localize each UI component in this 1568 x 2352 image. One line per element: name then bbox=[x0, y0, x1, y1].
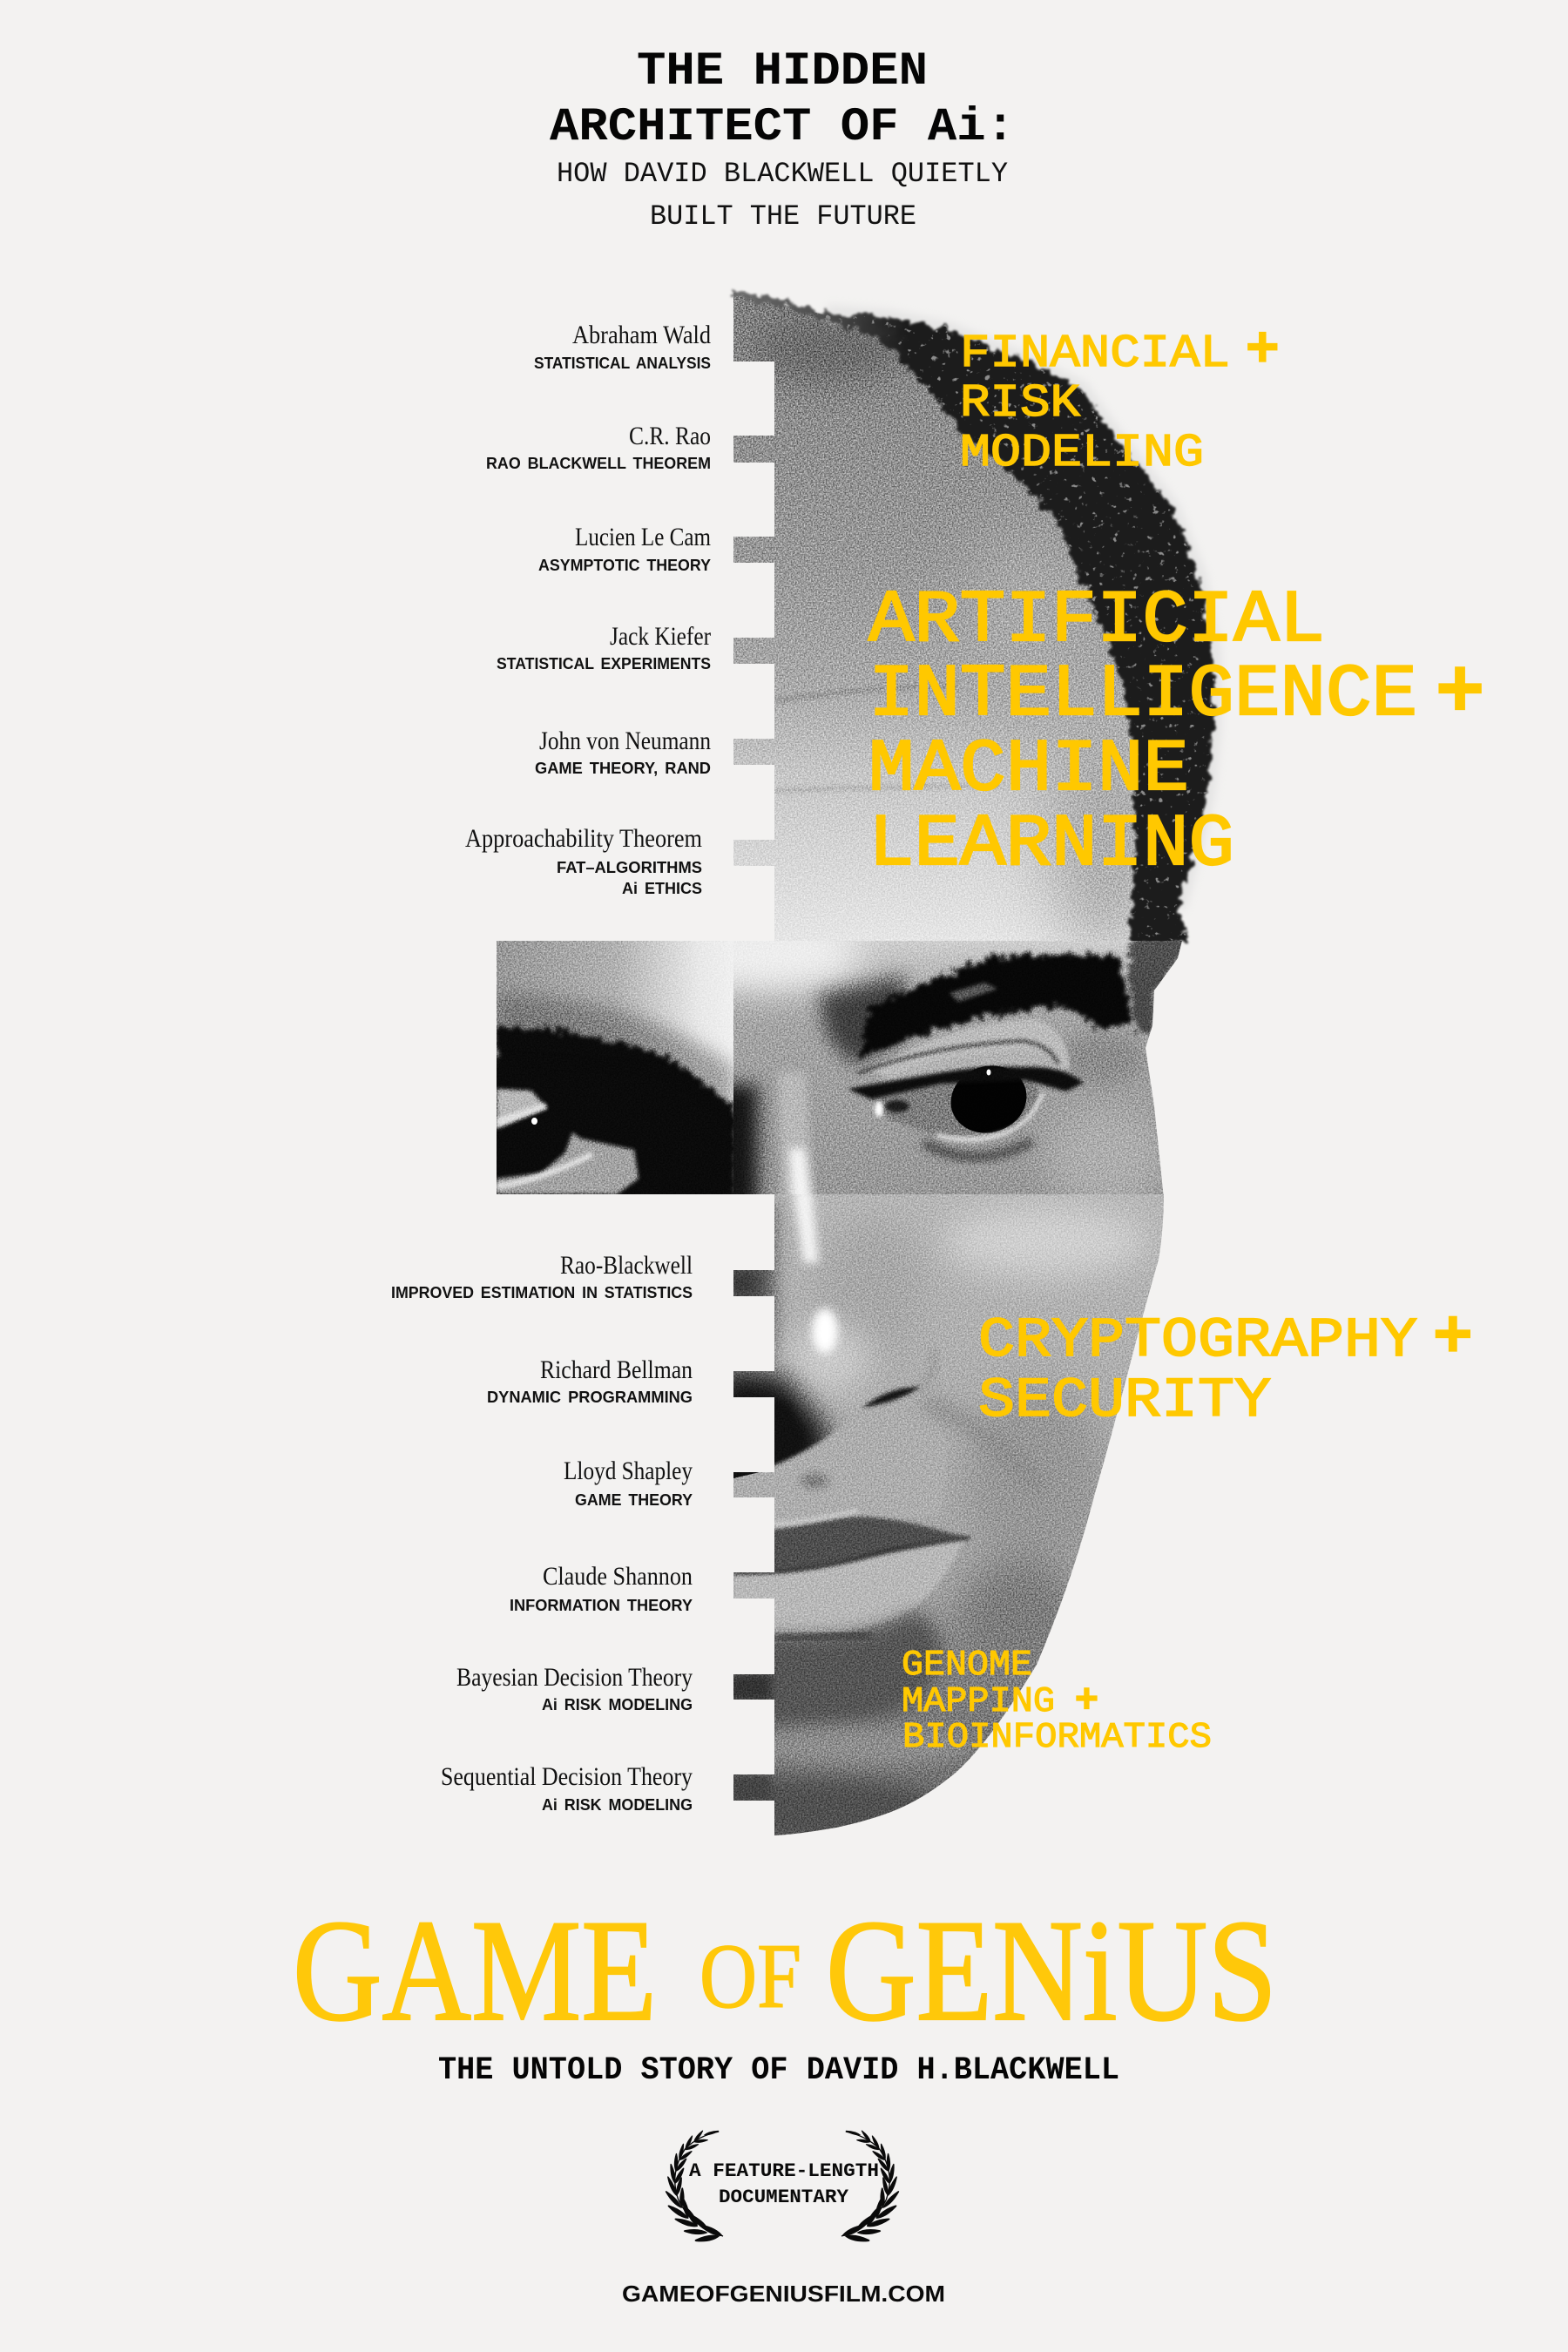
tagline: THE UNTOLD STORY OF DAVID H.BLACKWELL bbox=[438, 2052, 1119, 2089]
portrait: upper lip bbox=[733, 1517, 970, 1573]
entry: Approachability Theorem bbox=[465, 824, 702, 897]
entry: Jack Kiefer: Jack Kiefer bbox=[610, 622, 711, 651]
field label: artificial intelligence and machine learning bbox=[868, 580, 1484, 887]
field label: genome mapping and bioinformatics: GENOME bbox=[902, 1646, 1032, 1686]
poster bbox=[296, 52, 1482, 2301]
entry: John von Neumann: GAME THEORY, RAND bbox=[535, 759, 711, 777]
field label: genome mapping and bioinformatics: BIOINFORMATICS bbox=[902, 1718, 1212, 1758]
portrait: nose highlights bbox=[793, 1189, 819, 1263]
entry: Jack Kiefer: STATISTICAL EXPERIMENTS bbox=[497, 654, 711, 672]
field label: artificial intelligence and machine learning: MACHINE bbox=[868, 729, 1189, 812]
researcher list: lower bbox=[391, 1251, 693, 1814]
portrait: lower lip bbox=[733, 1539, 964, 1636]
entry: Lloyd Shapley bbox=[564, 1456, 693, 1509]
portrait: brow bbox=[819, 976, 906, 1064]
word: OF: OF bbox=[700, 1925, 801, 2027]
entry: Sequential Decision Theory bbox=[441, 1762, 693, 1814]
entry: Jack Kiefer bbox=[497, 622, 711, 672]
entry: Claude Shannon bbox=[510, 1562, 693, 1614]
badge text line two: DOCUMENTARY bbox=[719, 2186, 849, 2208]
entry: Rao-Blackwell: Rao-Blackwell bbox=[560, 1251, 693, 1280]
field label: financial and risk modeling: RISK bbox=[960, 377, 1080, 429]
word: GENiUS: GENiUS bbox=[826, 1890, 1277, 2051]
portrait: chin bbox=[733, 1612, 942, 1727]
plus sign: + bbox=[1246, 314, 1280, 378]
portrait of David Blackwell bbox=[488, 289, 1221, 1842]
entry: Claude Shannon: Claude Shannon bbox=[543, 1562, 693, 1591]
entry: Sequential Decision Theory: Ai RISK MODELING bbox=[542, 1795, 693, 1814]
entry: Lloyd Shapley: Lloyd Shapley bbox=[564, 1456, 693, 1485]
laurel badge bbox=[664, 2129, 901, 2243]
entry: Richard Bellman bbox=[487, 1355, 693, 1406]
field label: artificial intelligence and machine learning: ARTIFICIAL bbox=[868, 580, 1325, 663]
plus sign: + bbox=[1436, 641, 1484, 734]
entry: John von Neumann bbox=[535, 727, 711, 777]
film title bbox=[293, 1890, 1277, 2051]
portrait: eyelid bbox=[873, 1018, 1071, 1078]
portrait: nostril bbox=[862, 1387, 921, 1408]
entry: Abraham Wald bbox=[534, 321, 711, 372]
entry: Rao-Blackwell bbox=[391, 1251, 693, 1301]
entry: Abraham Wald: STATISTICAL ANALYSIS bbox=[534, 354, 711, 372]
entry: Lucien Le Cam bbox=[538, 523, 712, 574]
subtitle line one: HOW DAVID BLACKWELL QUIETLY bbox=[557, 158, 1008, 190]
headline line one: THE HIDDEN bbox=[637, 45, 928, 98]
entry: Sequential Decision Theory: Sequential Decision Theory bbox=[441, 1762, 693, 1791]
field label: cryptography and security: SECURITY bbox=[978, 1370, 1271, 1433]
entry: Bayesian Decision Theory: Bayesian Decision Theory bbox=[456, 1663, 693, 1692]
field label: cryptography and security bbox=[978, 1294, 1473, 1433]
plus sign: + bbox=[1075, 1675, 1098, 1720]
entry: Lucien Le Cam: Lucien Le Cam bbox=[575, 523, 711, 551]
field label: financial and risk modeling: MODELING bbox=[960, 427, 1204, 479]
plus sign: + bbox=[1433, 1294, 1473, 1371]
entry: Bayesian Decision Theory: Ai RISK MODELING bbox=[542, 1695, 693, 1713]
entry: C.R. Rao bbox=[486, 422, 711, 472]
portrait: eye band right side bbox=[733, 941, 1182, 1194]
icon: right laurel branch bbox=[841, 2129, 901, 2243]
icon: left laurel branch bbox=[664, 2129, 724, 2243]
field label: artificial intelligence and machine learning: INTELLIGENCE bbox=[868, 654, 1417, 737]
field label: genome mapping and bioinformatics bbox=[902, 1646, 1212, 1758]
researcher list: upper bbox=[465, 321, 712, 897]
entry: Richard Bellman: Richard Bellman bbox=[540, 1355, 693, 1384]
field label: artificial intelligence and machine learning: LEARNING bbox=[868, 804, 1234, 887]
portrait: eye band bbox=[497, 941, 1182, 1194]
portrait: hair bbox=[733, 290, 1213, 943]
entry: Lucien Le Cam: ASYMPTOTIC THEORY bbox=[538, 556, 712, 574]
entry: Claude Shannon: INFORMATION THEORY bbox=[510, 1596, 693, 1614]
website: GAMEOFGENIUSFILM.COM bbox=[622, 2281, 945, 2307]
headline line two: ARCHITECT OF Ai: bbox=[550, 101, 1015, 154]
field label: financial and risk modeling bbox=[960, 314, 1280, 479]
entry: C.R. Rao: C.R. Rao bbox=[629, 422, 711, 450]
entry: Abraham Wald: Abraham Wald bbox=[572, 321, 711, 349]
subtitle line two: BUILT THE FUTURE bbox=[650, 200, 916, 233]
entry: Rao-Blackwell: IMPROVED ESTIMATION IN STATISTICS bbox=[391, 1283, 693, 1301]
portrait: hair halo bbox=[827, 313, 1213, 909]
entry: John von Neumann: John von Neumann bbox=[539, 727, 711, 755]
entry: Approachability Theorem: FAT–ALGORITHMS bbox=[557, 858, 702, 876]
portrait: nose shadow bbox=[733, 1355, 843, 1458]
entry: Bayesian Decision Theory bbox=[456, 1663, 693, 1713]
word: GAME: GAME bbox=[293, 1890, 657, 2051]
entry: C.R. Rao: RAO BLACKWELL THEOREM bbox=[486, 454, 711, 472]
portrait: forehead section with tabs bbox=[733, 293, 1139, 941]
entry: Approachability Theorem: Ai ETHICS bbox=[622, 879, 702, 897]
entry: Lloyd Shapley: GAME THEORY bbox=[575, 1490, 693, 1509]
entry: Approachability Theorem: Approachability Theorem bbox=[465, 824, 702, 853]
portrait: lower face with tabs bbox=[733, 1194, 1164, 1835]
field label: financial and risk modeling: FINANCIAL bbox=[960, 328, 1230, 380]
entry: Richard Bellman: DYNAMIC PROGRAMMING bbox=[487, 1388, 693, 1406]
title bbox=[550, 45, 1015, 233]
field label: genome mapping and bioinformatics: MAPPING bbox=[902, 1682, 1055, 1722]
portrait: iris and eye bbox=[871, 1073, 1044, 1137]
badge text line one: A FEATURE-LENGTH bbox=[689, 2160, 879, 2182]
field label: cryptography and security: CRYPTOGRAPHY bbox=[978, 1310, 1417, 1373]
